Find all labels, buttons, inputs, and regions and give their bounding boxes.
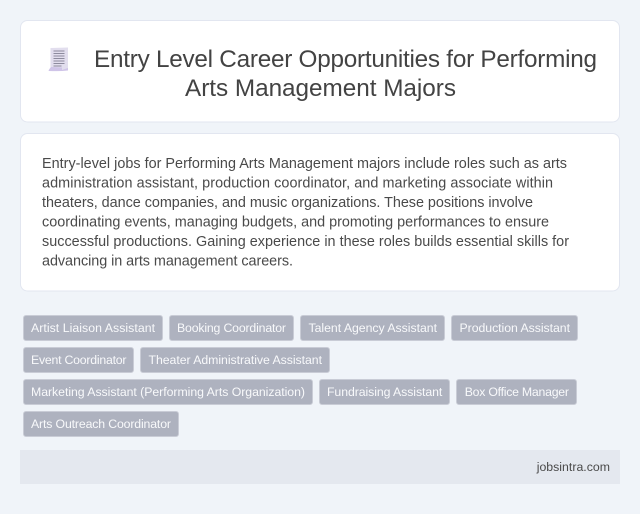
description text: Entry-level jobs for Performing Arts Management majors include roles such as arts bbox=[42, 156, 567, 172]
tag: Theater Administrative Assistant bbox=[140, 348, 330, 372]
tag: Fundraising Assistant: Fundraising Assistant bbox=[327, 385, 443, 399]
tag: Marketing Assistant (Performing Arts Organization): Marketing Assistant (Performing Arts Organization) bbox=[31, 385, 305, 399]
heading bbox=[94, 46, 597, 102]
tag: Artist Liaison Assistant bbox=[24, 316, 162, 340]
icon: document scroll bbox=[48, 48, 68, 71]
tag: Event Coordinator: Event Coordinator bbox=[31, 353, 126, 367]
description text: administration assistant, production coordinator, and marketing associate within bbox=[42, 176, 553, 192]
tag: Arts Outreach Coordinator bbox=[24, 412, 178, 436]
tag list bbox=[24, 316, 578, 436]
tag: Event Coordinator bbox=[24, 348, 134, 372]
heading: Arts Management Majors bbox=[185, 75, 456, 102]
description text: coordinating events, managing budgets, and promoting performances to ensure bbox=[42, 214, 549, 230]
description text: successful productions. Gaining experience in these roles builds essential skills for bbox=[42, 234, 569, 250]
description text: theaters, dance companies, and music organizations. These positions involve bbox=[42, 195, 533, 211]
description text: advancing in arts management careers. bbox=[42, 254, 293, 270]
tag: Production Assistant: Production Assistant bbox=[460, 321, 571, 335]
tag: Production Assistant bbox=[452, 316, 578, 340]
tag: Booking Coordinator bbox=[170, 316, 294, 340]
description text bbox=[42, 156, 569, 270]
tag: Artist Liaison Assistant: Artist Liaison Assistant bbox=[31, 321, 156, 335]
tag: Marketing Assistant (Performing Arts Organization) bbox=[24, 380, 312, 404]
tag: Box Office Manager bbox=[456, 380, 576, 404]
tag: Talent Agency Assistant: Talent Agency Assistant bbox=[308, 321, 438, 335]
tag: Talent Agency Assistant bbox=[300, 316, 444, 340]
tag: Booking Coordinator: Booking Coordinator bbox=[177, 321, 286, 335]
footer bbox=[20, 450, 620, 484]
tag: Fundraising Assistant bbox=[320, 380, 450, 404]
tag: Arts Outreach Coordinator: Arts Outreach Coordinator bbox=[31, 417, 171, 431]
footer site name: jobsintra.com bbox=[536, 460, 610, 474]
panel: description card bbox=[20, 134, 620, 291]
panel: title card bbox=[20, 20, 620, 122]
tag: Box Office Manager: Box Office Manager bbox=[465, 385, 569, 399]
heading: Entry Level Career Opportunities for Performing bbox=[94, 46, 597, 73]
tag: Theater Administrative Assistant: Theater Administrative Assistant bbox=[148, 353, 323, 367]
